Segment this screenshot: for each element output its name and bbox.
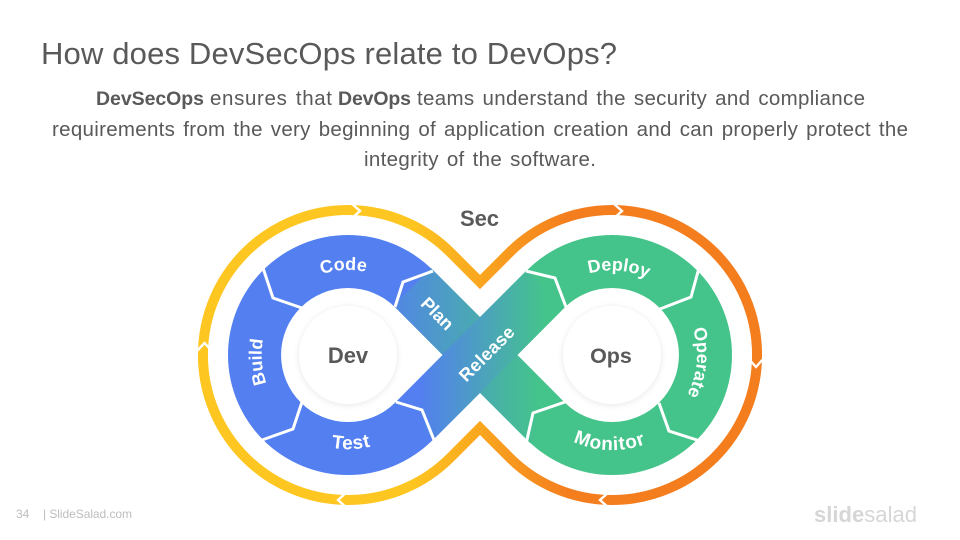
segment labels: Operate [688,328,708,397]
Dev centre button [299,306,397,404]
segment labels: Deploy [588,258,651,279]
segment labels: Plan [417,293,458,334]
Ops centre button [563,306,661,404]
intro paragraph: DevOps [338,88,411,110]
intro paragraph: ensures that [210,87,332,110]
intro paragraph [52,87,908,171]
Dev centre button: Dev [328,343,369,368]
intro paragraph: integrity of the software. [364,148,596,171]
segment labels [248,257,708,450]
Release band [395,270,565,440]
title: How does DevSecOps relate to DevOps? [41,36,617,71]
segment separators [262,268,700,444]
footer site name: | SlideSalad.com [43,507,132,521]
intro paragraph: teams understand the security and compliance [417,87,865,110]
intro paragraph: DevSecOps [96,88,204,110]
segment labels: Release [455,322,519,386]
Plan to Monitor band [393,268,568,443]
logo: slidesalad [814,502,917,527]
Sec label: Sec [460,206,499,231]
Ops centre button: Ops [590,344,632,368]
segment labels: Build [248,339,266,386]
infinity diagram [198,205,762,505]
segment labels: Monitor [574,430,643,450]
segment labels: Test [332,434,370,450]
white teardrop hubs [281,288,679,422]
blue Dev wheel [228,235,468,475]
outer security loop [197,203,764,508]
green Ops wheel [492,235,732,475]
footer page number: 34 [16,507,30,521]
segment labels: Code [320,257,366,273]
intro paragraph: requirements from the very beginning of application creation and can properly protect the [52,118,908,141]
